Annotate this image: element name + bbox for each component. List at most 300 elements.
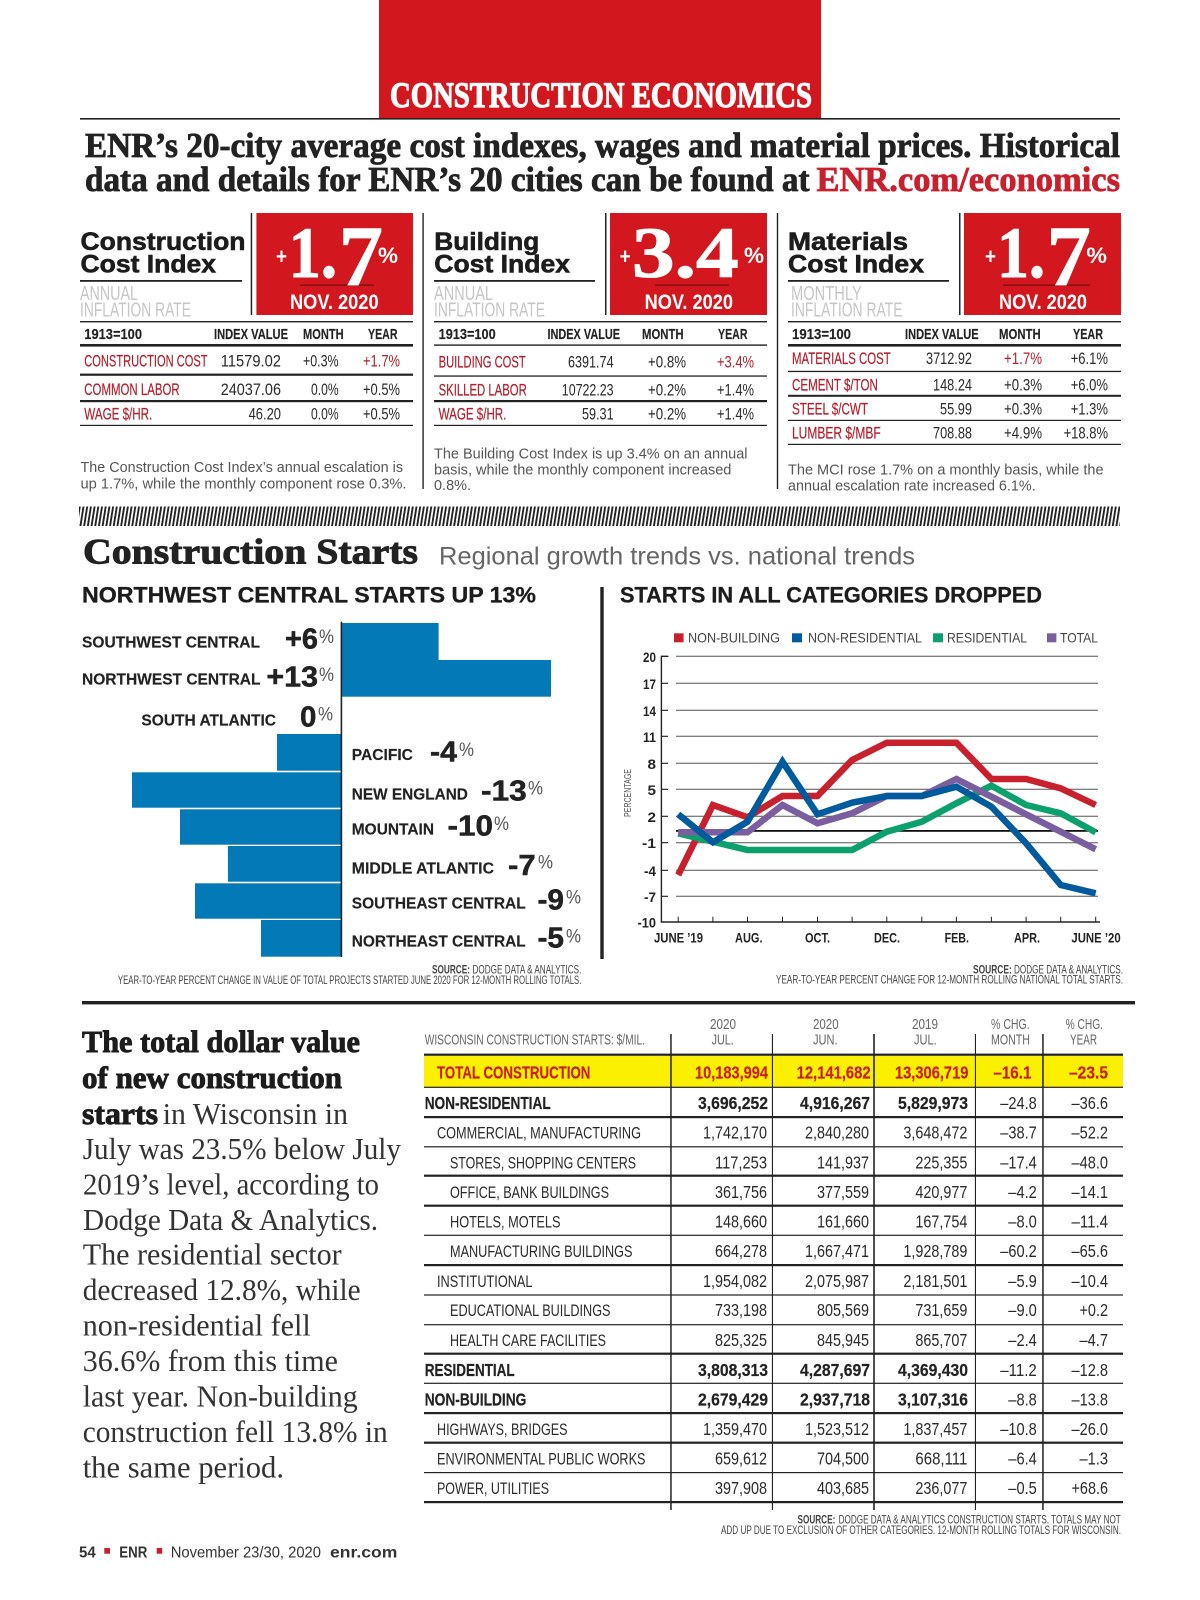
column headers: JUL. bbox=[914, 1032, 937, 1048]
data table: +1.7% bbox=[1004, 350, 1042, 368]
row: health care facilities: –2.4 bbox=[1008, 1330, 1037, 1350]
row: office, bank buildings bbox=[450, 1182, 1108, 1202]
section heading: construction starts bbox=[83, 531, 915, 571]
row: commercial, manufacturing bbox=[437, 1122, 1108, 1142]
row: stores, shopping centers: 225,355 bbox=[915, 1152, 967, 1172]
data table: YEAR bbox=[1073, 326, 1103, 343]
row: non-residential: 3,696,252 bbox=[698, 1093, 768, 1113]
row: educational buildings: 805,569 bbox=[817, 1300, 869, 1320]
line chart source note bbox=[776, 965, 1123, 987]
table source note bbox=[721, 1514, 1121, 1537]
line chart legend: NON-BUILDING bbox=[688, 629, 780, 645]
region label: northeast central: -5 bbox=[538, 923, 564, 955]
note text: up 1.7%, while the monthly component rose 0.3%. bbox=[80, 476, 406, 493]
row: environmental public works bbox=[437, 1448, 1108, 1468]
row: non-building: –13.8 bbox=[1072, 1389, 1108, 1409]
rate label: INFLATION RATE bbox=[791, 300, 902, 322]
summary paragraph: last year. Non-building bbox=[83, 1378, 358, 1413]
row: educational buildings: EDUCATIONAL BUILDINGS bbox=[450, 1301, 610, 1320]
data table: SKILLED LABOR bbox=[439, 381, 527, 399]
header banner: construction economics: CONSTRUCTION ECONOMICS bbox=[390, 75, 812, 115]
section heading: construction starts: Regional growth trends vs. national trends bbox=[439, 542, 915, 570]
series: residential bbox=[678, 786, 1096, 850]
region label: pacific: -4 bbox=[430, 737, 457, 769]
data table bbox=[788, 321, 1121, 445]
bar chart source note: YEAR-TO-YEAR PERCENT CHANGE IN VALUE OF TOTAL PROJECTS STARTED JUNE 2020 FOR 12-MONTH ROLLING TOTALS. bbox=[118, 975, 581, 987]
row: non-building: 2,679,429 bbox=[698, 1389, 768, 1409]
region label: mountain: MOUNTAIN bbox=[352, 821, 434, 838]
panel title: Cost Index bbox=[80, 250, 216, 278]
row: manufacturing buildings: 664,278 bbox=[715, 1241, 767, 1261]
row: stores, shopping centers: STORES, SHOPPING CENTERS bbox=[450, 1153, 636, 1172]
data table: 6391.74 bbox=[568, 354, 614, 372]
rate label bbox=[791, 283, 902, 322]
row: office, bank buildings: –4.2 bbox=[1008, 1182, 1037, 1202]
row: institutional: 1,954,082 bbox=[703, 1271, 767, 1291]
row: institutional: 2,181,501 bbox=[903, 1271, 967, 1291]
region label: southeast central: SOUTHEAST CENTRAL bbox=[352, 895, 526, 912]
row: total construction: 10,183,994 bbox=[695, 1062, 768, 1082]
data table: wisconsin construction starts bbox=[424, 1017, 1123, 1510]
note text bbox=[434, 445, 748, 494]
y axis labels: 17 bbox=[643, 676, 656, 692]
data table: +0.5% bbox=[363, 405, 400, 423]
summary paragraph: non-residential fell bbox=[83, 1308, 311, 1342]
row: hotels, motels: 161,660 bbox=[817, 1211, 869, 1231]
summary paragraph: of new construction bbox=[82, 1060, 342, 1095]
region label: new england: NEW ENGLAND bbox=[352, 786, 468, 803]
data table: MATERIALS COST bbox=[792, 350, 891, 368]
row: commercial, manufacturing: 1,742,170 bbox=[703, 1122, 767, 1142]
x axis labels: JUNE ’19 bbox=[654, 929, 703, 945]
data table: +0.3% bbox=[303, 353, 339, 371]
row: office, bank buildings: OFFICE, BANK BUILDINGS bbox=[450, 1183, 609, 1202]
headline: ENR.com/economics bbox=[816, 160, 1120, 199]
column headers: JUN. bbox=[813, 1032, 838, 1048]
data table bbox=[80, 321, 413, 426]
region label: middle atlantic: % bbox=[538, 853, 553, 874]
panel title bbox=[80, 228, 246, 278]
headline: data and details for ENR’s 20 cities can be found at bbox=[85, 160, 810, 199]
row: manufacturing buildings: 1,667,471 bbox=[805, 1241, 869, 1261]
x axis labels bbox=[654, 929, 1121, 945]
bar chart source note bbox=[118, 965, 581, 987]
y axis labels: -4 bbox=[644, 863, 656, 879]
region label: mountain: -10 bbox=[448, 811, 493, 843]
row: commercial, manufacturing: 2,840,280 bbox=[805, 1122, 869, 1142]
data table: +1.4% bbox=[717, 405, 754, 423]
row: power, utilities bbox=[437, 1478, 1108, 1498]
row: power, utilities: –0.5 bbox=[1008, 1478, 1037, 1498]
red callout +1.7%: 7 bbox=[1046, 208, 1091, 304]
row: commercial, manufacturing: COMMERCIAL, MANUFACTURING bbox=[437, 1123, 641, 1142]
line chart source note: DODGE DATA & ANALYTICS. bbox=[1014, 965, 1123, 977]
red callout +1.7%: + bbox=[276, 244, 287, 269]
y axis labels: 14 bbox=[643, 703, 656, 719]
column headers: YEAR bbox=[1070, 1032, 1097, 1048]
row: hotels, motels: 167,754 bbox=[915, 1211, 968, 1231]
row: stores, shopping centers: 117,253 bbox=[715, 1152, 767, 1172]
row: power, utilities: POWER, UTILITIES bbox=[437, 1479, 549, 1498]
region label: northwest central bbox=[82, 662, 334, 694]
data table: WAGE $/HR. bbox=[439, 405, 506, 423]
data table: WAGE $/HR. bbox=[84, 405, 152, 423]
data table: +6.1% bbox=[1071, 350, 1108, 368]
data table: +1.3% bbox=[1071, 400, 1108, 418]
series: total bbox=[678, 779, 1096, 849]
line chart source note: SOURCE: bbox=[973, 965, 1012, 977]
region label: new england: % bbox=[528, 779, 543, 800]
row: institutional: INSTITUTIONAL bbox=[437, 1272, 532, 1291]
summary paragraph: in Wisconsin in bbox=[163, 1096, 348, 1131]
data table: 0.0% bbox=[311, 381, 339, 399]
region label: south atlantic: % bbox=[318, 705, 333, 726]
row: commercial, manufacturing: –52.2 bbox=[1072, 1122, 1108, 1142]
row: non-building bbox=[425, 1389, 1108, 1409]
row: residential: 4,369,430 bbox=[898, 1360, 968, 1380]
data table: +0.5% bbox=[363, 381, 400, 399]
data table: 55.99 bbox=[940, 400, 972, 418]
row: stores, shopping centers: 141,937 bbox=[817, 1152, 869, 1172]
summary paragraph: The residential sector bbox=[83, 1236, 342, 1272]
red callout +1.7%: NOV. 2020 bbox=[290, 291, 379, 314]
summary paragraph: 36.6% from this time bbox=[83, 1343, 338, 1378]
column headers: % CHG. bbox=[991, 1017, 1030, 1033]
note text: basis, while the monthly component increased bbox=[434, 461, 731, 478]
row: power, utilities: +68.6 bbox=[1072, 1478, 1108, 1498]
region label: middle atlantic bbox=[352, 850, 553, 882]
region label: mountain: % bbox=[494, 814, 509, 835]
column headers: WISCONSIN CONSTRUCTION STARTS: $/MIL. bbox=[425, 1032, 645, 1048]
data table: 0.0% bbox=[311, 405, 339, 423]
footer: enr.com bbox=[330, 1544, 397, 1561]
row: institutional bbox=[437, 1271, 1108, 1291]
row: environmental public works: 668,111 bbox=[915, 1448, 967, 1468]
row: residential: 4,287,697 bbox=[800, 1360, 870, 1380]
row: institutional: –10.4 bbox=[1072, 1271, 1108, 1291]
column headers: 2020 bbox=[710, 1017, 736, 1033]
red callout +3.4%: 3.4 bbox=[632, 213, 739, 293]
row: office, bank buildings: –14.1 bbox=[1072, 1182, 1108, 1202]
column headers: 2019 bbox=[912, 1017, 938, 1033]
row: non-building: 3,107,316 bbox=[898, 1389, 968, 1409]
row: total construction: 12,141,682 bbox=[797, 1062, 871, 1082]
rate label bbox=[80, 283, 191, 322]
line chart bbox=[623, 649, 1121, 945]
y axis labels: -7 bbox=[644, 889, 656, 905]
row: environmental public works: –1.3 bbox=[1080, 1448, 1108, 1468]
note text: The MCI rose 1.7% on a monthly basis, while the bbox=[788, 461, 1104, 478]
summary paragraph: 2019’s level, according to bbox=[83, 1166, 379, 1201]
region label: southeast central: % bbox=[566, 887, 581, 908]
red callout +1.7%: % bbox=[378, 243, 398, 268]
table source note: SOURCE: bbox=[798, 1514, 835, 1526]
line chart legend bbox=[674, 629, 1098, 645]
data table: +0.3% bbox=[1004, 400, 1042, 418]
row: power, utilities: 403,685 bbox=[817, 1478, 869, 1498]
row: manufacturing buildings: MANUFACTURING BUILDINGS bbox=[450, 1242, 632, 1261]
panel title: Cost Index bbox=[434, 250, 570, 278]
bars bbox=[132, 623, 551, 957]
data table: YEAR bbox=[718, 326, 748, 343]
row: non-building: –8.8 bbox=[1008, 1389, 1037, 1409]
row: educational buildings: –9.0 bbox=[1008, 1300, 1037, 1320]
row: environmental public works: 659,612 bbox=[715, 1448, 767, 1468]
panel: construction cost index bbox=[80, 208, 413, 493]
region label: middle atlantic: MIDDLE ATLANTIC bbox=[352, 860, 494, 877]
header banner: construction economics bbox=[379, 0, 821, 118]
y axis labels: 2 bbox=[648, 809, 656, 825]
region label: northeast central: NORTHEAST CENTRAL bbox=[352, 933, 526, 950]
data table: +3.4% bbox=[717, 354, 754, 372]
row: residential: –12.8 bbox=[1072, 1360, 1108, 1380]
red callout +1.7%: % bbox=[1086, 243, 1107, 268]
column headers: % CHG. bbox=[1066, 1017, 1103, 1033]
data table: +4.9% bbox=[1004, 424, 1042, 442]
row: commercial, manufacturing: –38.7 bbox=[1000, 1122, 1037, 1142]
row: office, bank buildings: 361,756 bbox=[715, 1182, 767, 1202]
series: non-building bbox=[678, 743, 1096, 875]
red callout +1.7%: + bbox=[985, 244, 996, 269]
rate label bbox=[434, 283, 545, 322]
y axis labels: -1 bbox=[642, 835, 656, 851]
row: total construction bbox=[437, 1062, 1108, 1082]
bar chart source note: DODGE DATA & ANALYTICS. bbox=[472, 965, 581, 977]
rate label: INFLATION RATE bbox=[434, 300, 545, 322]
bar chart source note: SOURCE: bbox=[432, 965, 470, 977]
panel title: Building bbox=[434, 228, 539, 256]
red callout +3.4%: NOV. 2020 bbox=[645, 291, 733, 314]
panel title: Cost Index bbox=[788, 250, 924, 278]
region label: new england: -13 bbox=[481, 776, 527, 808]
rate label: INFLATION RATE bbox=[80, 300, 191, 322]
data table: 59.31 bbox=[582, 405, 614, 423]
data table: +1.4% bbox=[717, 381, 754, 399]
data table: YEAR bbox=[368, 326, 398, 343]
row: commercial, manufacturing: 3,648,472 bbox=[903, 1122, 967, 1142]
row: environmental public works: ENVIRONMENTAL PUBLIC WORKS bbox=[437, 1449, 646, 1468]
summary paragraph: decreased 12.8%, while bbox=[83, 1272, 361, 1307]
headline: ENR’s 20-city average cost indexes, wages and material prices. Historical bbox=[85, 126, 1120, 165]
column headers bbox=[425, 1017, 1103, 1048]
region label: mountain bbox=[352, 811, 509, 843]
summary paragraph: the same period. bbox=[83, 1449, 284, 1484]
note text: The Construction Cost Index’s annual escalation is bbox=[80, 459, 403, 476]
data table: 1913=100 bbox=[439, 326, 496, 343]
footer: 54 bbox=[79, 1544, 96, 1561]
row: non-residential: –24.8 bbox=[1000, 1093, 1037, 1113]
bar chart: regional starts bbox=[82, 622, 581, 957]
row: non-building: 2,937,718 bbox=[800, 1389, 870, 1409]
row: health care facilities: 865,707 bbox=[915, 1330, 967, 1350]
summary paragraph: construction fell 13.8% in bbox=[83, 1414, 388, 1449]
row: health care facilities: HEALTH CARE FACILITIES bbox=[450, 1331, 606, 1350]
y axis labels bbox=[638, 649, 656, 930]
y axis labels: 11 bbox=[643, 729, 656, 745]
data table: 24037.06 bbox=[221, 381, 281, 399]
data table: 1913=100 bbox=[84, 326, 142, 343]
data table: MONTH bbox=[303, 326, 344, 343]
data table: +0.8% bbox=[648, 354, 686, 372]
red callout +3.4%: % bbox=[744, 243, 764, 268]
data table: COMMON LABOR bbox=[84, 381, 180, 399]
x axis labels: AUG. bbox=[735, 929, 762, 945]
note text: 0.8%. bbox=[434, 477, 471, 494]
row: highways, bridges: HIGHWAYS, BRIDGES bbox=[437, 1420, 568, 1439]
row: highways, bridges: –26.0 bbox=[1072, 1419, 1108, 1439]
region label: middle atlantic: -7 bbox=[508, 850, 536, 882]
data table: CEMENT $/TON bbox=[792, 376, 878, 394]
red callout +1.7%: 1. bbox=[997, 213, 1045, 293]
region label: southwest central bbox=[82, 623, 334, 655]
data table: +18.8% bbox=[1064, 424, 1108, 442]
region label: south atlantic: 0 bbox=[300, 702, 316, 734]
row: office, bank buildings: 377,559 bbox=[817, 1182, 869, 1202]
row: health care facilities: 825,325 bbox=[715, 1330, 767, 1350]
row: health care facilities bbox=[450, 1330, 1108, 1350]
data table: +0.2% bbox=[648, 405, 686, 423]
data table: BUILDING COST bbox=[439, 354, 526, 372]
row: educational buildings bbox=[450, 1300, 1108, 1320]
x axis labels: JUNE ’20 bbox=[1071, 929, 1121, 945]
note text bbox=[788, 461, 1104, 495]
row: manufacturing buildings bbox=[450, 1241, 1108, 1261]
row: manufacturing buildings: –65.6 bbox=[1072, 1241, 1108, 1261]
region label: northwest central: +13 bbox=[266, 662, 318, 694]
footer: ENR bbox=[119, 1544, 148, 1561]
x axis labels: FEB. bbox=[945, 929, 969, 945]
region label: southeast central bbox=[352, 884, 581, 916]
row: total construction: 13,306,719 bbox=[895, 1062, 969, 1082]
data table: LUMBER $/MBF bbox=[792, 424, 881, 442]
row: educational buildings: 731,659 bbox=[915, 1300, 967, 1320]
panel title: Materials bbox=[788, 228, 908, 256]
note text bbox=[80, 459, 406, 493]
column headers: JUL. bbox=[712, 1032, 734, 1048]
row: non-residential bbox=[425, 1093, 1108, 1113]
region label: northeast central bbox=[352, 923, 581, 955]
row: highways, bridges: 1,359,470 bbox=[703, 1419, 767, 1439]
region label: northwest central: % bbox=[319, 665, 334, 686]
row: total construction: –16.1 bbox=[993, 1062, 1032, 1082]
rate label: ANNUAL bbox=[434, 283, 493, 305]
row: highways, bridges: 1,523,512 bbox=[805, 1419, 869, 1439]
region label: pacific: % bbox=[459, 740, 474, 761]
row: residential: RESIDENTIAL bbox=[425, 1360, 515, 1380]
row: power, utilities: 236,077 bbox=[915, 1478, 967, 1498]
red callout +3.4% bbox=[610, 213, 767, 315]
red callout +1.7% bbox=[256, 208, 413, 315]
footer bbox=[79, 1544, 397, 1561]
row: hotels, motels bbox=[450, 1211, 1108, 1231]
row: total construction: –23.5 bbox=[1069, 1062, 1108, 1082]
region label: northeast central: % bbox=[566, 926, 581, 947]
data table: MONTH bbox=[642, 326, 684, 343]
column headers: MONTH bbox=[991, 1032, 1030, 1048]
red callout +1.7%: 7 bbox=[339, 208, 383, 304]
note text: annual escalation rate increased 6.1%. bbox=[788, 478, 1036, 495]
region label: southwest central: % bbox=[319, 627, 334, 648]
data table bbox=[434, 321, 767, 426]
x axis labels: APR. bbox=[1014, 929, 1040, 945]
data table: 10722.23 bbox=[562, 381, 614, 399]
row: educational buildings: 733,198 bbox=[715, 1300, 767, 1320]
summary paragraph: Dodge Data & Analytics. bbox=[83, 1202, 378, 1237]
data table: INDEX VALUE bbox=[905, 326, 979, 343]
bar chart heading: NORTHWEST CENTRAL STARTS UP 13% bbox=[82, 583, 536, 608]
row: manufacturing buildings: 1,928,789 bbox=[903, 1241, 967, 1261]
summary paragraph: July was 23.5% below July bbox=[83, 1131, 401, 1166]
row: highways, bridges bbox=[437, 1419, 1108, 1439]
row: health care facilities: –4.7 bbox=[1080, 1330, 1108, 1350]
row: non-residential: –36.6 bbox=[1072, 1093, 1108, 1113]
summary paragraph: starts bbox=[82, 1096, 158, 1131]
row: non-residential: NON-RESIDENTIAL bbox=[425, 1093, 551, 1113]
line chart heading: STARTS IN ALL CATEGORIES DROPPED bbox=[620, 583, 1042, 608]
data table: CONSTRUCTION COST bbox=[84, 353, 208, 371]
x axis labels: DEC. bbox=[874, 929, 900, 945]
row: health care facilities: 845,945 bbox=[817, 1330, 869, 1350]
region label: south atlantic bbox=[141, 702, 333, 734]
rate label: MONTHLY bbox=[791, 283, 862, 305]
red callout +3.4%: + bbox=[620, 244, 631, 269]
row: hotels, motels: 148,660 bbox=[715, 1211, 767, 1231]
y axis labels: 8 bbox=[648, 756, 656, 772]
series: non-residential bbox=[678, 762, 1096, 893]
row: institutional: 2,075,987 bbox=[805, 1271, 869, 1291]
row: hotels, motels: HOTELS, MOTELS bbox=[450, 1212, 560, 1231]
red callout +1.7%: NOV. 2020 bbox=[999, 291, 1087, 314]
line chart legend: TOTAL bbox=[1060, 629, 1098, 645]
data table: +0.2% bbox=[648, 381, 686, 399]
y axis labels: 5 bbox=[648, 782, 656, 798]
section heading: construction starts: Construction Starts bbox=[83, 531, 418, 571]
row: educational buildings: +0.2 bbox=[1080, 1300, 1108, 1320]
data table: 1913=100 bbox=[792, 326, 851, 343]
row: non-building: NON-BUILDING bbox=[425, 1389, 526, 1409]
column headers: 2020 bbox=[813, 1017, 839, 1033]
rate label: ANNUAL bbox=[80, 283, 138, 305]
footer: November 23/30, 2020 bbox=[171, 1544, 321, 1561]
row: total construction: TOTAL CONSTRUCTION bbox=[437, 1062, 590, 1082]
data table: +0.3% bbox=[1004, 376, 1042, 394]
row: stores, shopping centers: –17.4 bbox=[1000, 1152, 1037, 1172]
data table: 11579.02 bbox=[221, 353, 281, 371]
note text: The Building Cost Index is up 3.4% on an annual bbox=[434, 445, 748, 462]
panel title bbox=[788, 228, 924, 278]
data table: 46.20 bbox=[249, 405, 281, 423]
row: manufacturing buildings: –60.2 bbox=[1000, 1241, 1037, 1261]
data table: STEEL $/CWT bbox=[792, 400, 868, 418]
data table: 148.24 bbox=[933, 376, 972, 394]
row: hotels, motels: –8.0 bbox=[1008, 1211, 1037, 1231]
row: non-residential: 5,829,973 bbox=[898, 1093, 968, 1113]
panel: building cost index bbox=[434, 213, 767, 494]
data table: 3712.92 bbox=[926, 350, 972, 368]
y axis labels: 20 bbox=[643, 649, 656, 665]
row: stores, shopping centers bbox=[450, 1152, 1108, 1172]
panel title: Construction bbox=[80, 228, 246, 256]
summary paragraph bbox=[82, 1024, 401, 1484]
x axis labels: OCT. bbox=[805, 929, 830, 945]
data table: +1.7% bbox=[363, 353, 400, 371]
line chart legend: RESIDENTIAL bbox=[947, 629, 1027, 645]
region label: south atlantic: SOUTH ATLANTIC bbox=[141, 712, 276, 729]
row: non-residential: 4,916,267 bbox=[800, 1093, 870, 1113]
row: highways, bridges: –10.8 bbox=[1000, 1419, 1037, 1439]
row: residential bbox=[425, 1360, 1108, 1380]
region label: new england bbox=[352, 776, 543, 808]
